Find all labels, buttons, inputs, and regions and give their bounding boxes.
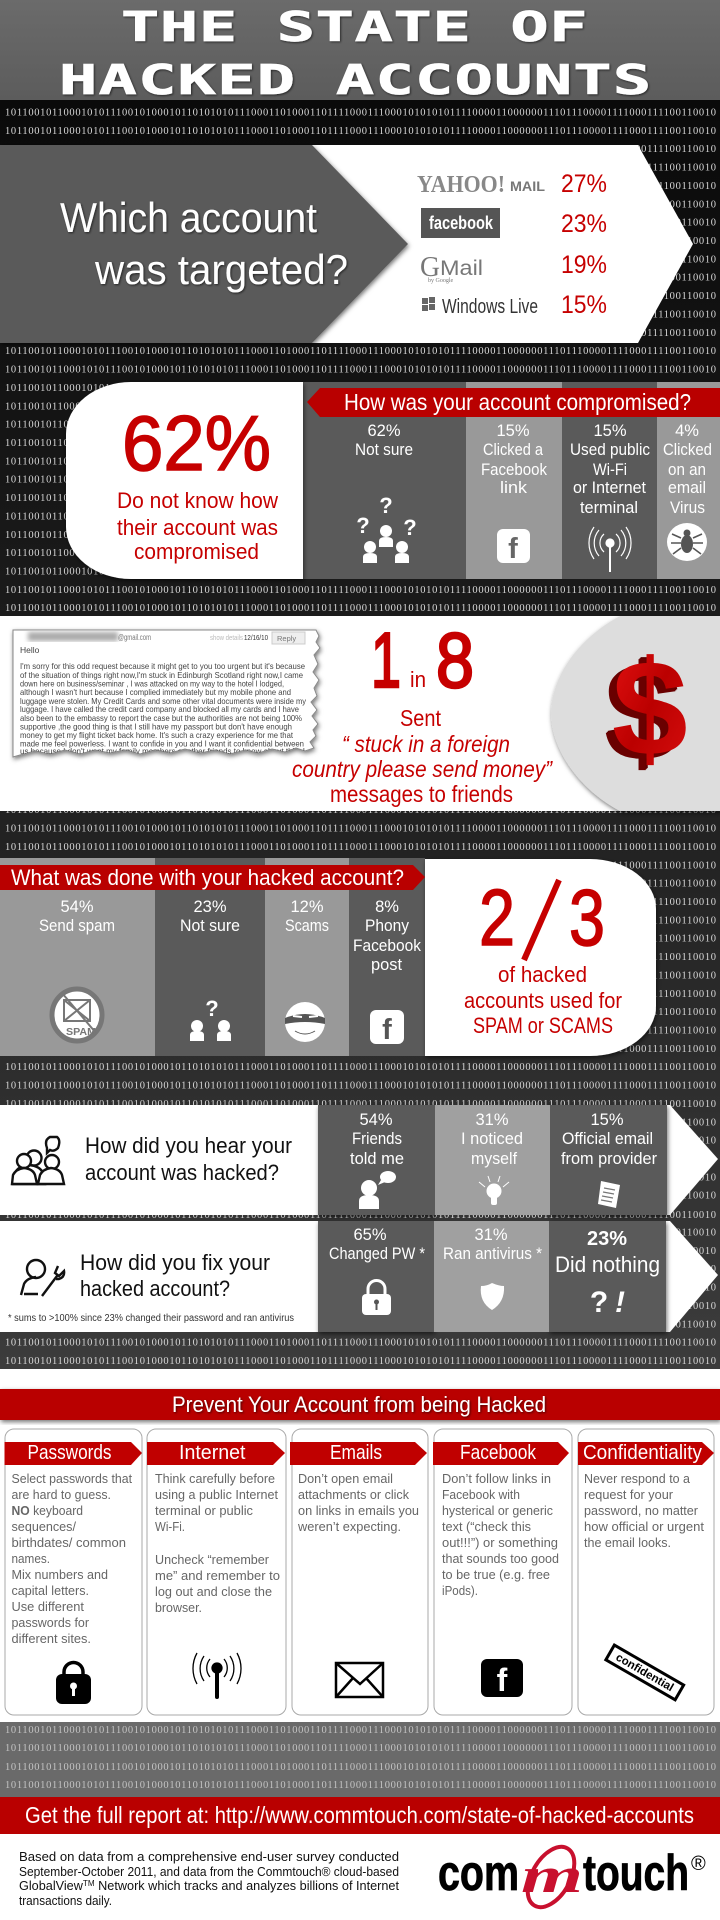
panel: how was your account compromised bbox=[66, 382, 720, 579]
binary code background rows: 10110010110001010111001010001011010101011100011010001101111000111000101010101111000011000000111011100001111000111100110010 bbox=[5, 181, 716, 192]
card: emails bbox=[290, 1429, 428, 1715]
column labels: Not sure bbox=[180, 917, 240, 935]
page background bbox=[0, 100, 720, 1369]
email screenshot: made me feel powerless. I want to confide in you and I want it confidential between bbox=[20, 738, 304, 748]
icon: person with wrench bbox=[21, 1260, 64, 1296]
card: passwords: Mix numbers and bbox=[12, 1567, 108, 1582]
stat: 1 in 8: in bbox=[410, 667, 426, 692]
binary code background rows: 10110010110001010111001010001011010101011100011010001101111000111000101010101111000011000000111011100001111000111100110010 bbox=[5, 530, 716, 541]
email screenshot: Reply bbox=[277, 634, 296, 643]
binary code background rows: 10110010110001010111001010001011010101011100011010001101111000111000101010101111000011000000111011100001111000111100110010 bbox=[5, 860, 716, 871]
question: how did you hear: How did you hear your bbox=[85, 1133, 292, 1158]
icon: document bbox=[598, 1181, 620, 1208]
binary code background rows bbox=[5, 108, 716, 1367]
footer binary band: 10110010110001010111001010001011010101011100011010001101111000111000101010101111000011000000111011100001111000111100110010 bbox=[5, 1780, 716, 1791]
panel: what was done with your hacked account bbox=[0, 858, 656, 1056]
stat: 62 percent: their account was bbox=[117, 515, 278, 540]
binary code background rows: 10110010110001010111001010001011010101011100011010001101111000111000101010101111000011000000111011100001111000111100110010 bbox=[5, 475, 716, 486]
footer binary band: 10110010110001010111001010001011010101011100011010001101111000111000101010101111000011000000111011100001111000111100110010 bbox=[5, 1725, 716, 1736]
card: facebook: Facebook bbox=[460, 1442, 537, 1464]
binary code background rows: 10110010110001010111001010001011010101011100011010001101111000111000101010101111000011000000111011100001111000111100110010 bbox=[5, 824, 716, 834]
binary code background rows: 10110010110001010111001010001011010101011100011010001101111000111000101010101111000011000000111011100001111000111100110010 bbox=[5, 456, 716, 467]
grey dollar circle bbox=[551, 616, 720, 811]
binary code background rows: 10110010110001010111001010001011010101011100011010001101111000111000101010101111000011000000111011100001111000111100110010 bbox=[5, 236, 716, 247]
email screenshot: down here on business/seminar , I was attacked on my way to the hotel I lodged, bbox=[20, 678, 284, 688]
card: facebook: to be true (e.g. free bbox=[442, 1567, 550, 1582]
card: passwords: Use different bbox=[12, 1599, 84, 1614]
column labels: post bbox=[371, 956, 402, 974]
question: how did you fix bbox=[80, 1250, 270, 1301]
icon: padlock bbox=[362, 1280, 391, 1315]
binary code background rows: 10110010110001010111001010001011010101011100011010001101111000111000101010101111000011000000111011100001111000111100110010 bbox=[5, 1154, 716, 1165]
column labels: 8% bbox=[375, 898, 399, 916]
card: internet: Internet bbox=[179, 1442, 246, 1464]
binary code background rows: 10110010110001010111001010001011010101011100011010001101111000111000101010101111000011000000111011100001111000111100110010 bbox=[5, 1210, 716, 1221]
icon: light bulb bbox=[479, 1176, 509, 1205]
column labels: 31% bbox=[475, 1111, 509, 1129]
email screenshot: us because I don't want my family members or other friends to know about this. I bbox=[20, 746, 305, 756]
footer methodology text: Based on data from a comprehensive end-user survey conducted bbox=[19, 1850, 399, 1864]
card: emails: weren’t expecting. bbox=[297, 1519, 401, 1534]
email screenshot: of the situation of things right now,I'm stuck in Edinburgh Scotland right now,I came bbox=[20, 670, 303, 680]
footer binary band: 10110010110001010111001010001011010101011100011010001101111000111000101010101111000011000000111011100001111000111100110010 bbox=[5, 1762, 716, 1773]
card: passwords: Select passwords that bbox=[12, 1471, 132, 1486]
binary code background rows: 10110010110001010111001010001011010101011100011010001101111000111000101010101111000011000000111011100001111000111100110010 bbox=[5, 218, 716, 229]
icon: confused people: ? bbox=[356, 513, 370, 538]
email screenshot: show details bbox=[210, 635, 243, 642]
binary code background rows: 10110010110001010111001010001011010101011100011010001101111000111000101010101111000011000000111011100001111000111100110010 bbox=[5, 511, 716, 522]
card: facebook bbox=[433, 1429, 572, 1715]
binary code background rows: 10110010110001010111001010001011010101011100011010001101111000111000101010101111000011000000111011100001111000111100110010 bbox=[5, 842, 716, 853]
icon: no spam bbox=[52, 989, 102, 1041]
binary code background rows: 10110010110001010111001010001011010101011100011010001101111000111000101010101111000011000000111011100001111000111100110010 bbox=[5, 915, 716, 926]
card: emails: Don’t open email bbox=[298, 1471, 393, 1486]
banner: what was done: What was done with your hacked account? bbox=[11, 865, 404, 890]
column labels: Clicked a bbox=[483, 441, 544, 459]
binary code background rows: 10110010110001010111001010001011010101011100011010001101111000111000101010101111000011000000111011100001111000111100110010 bbox=[5, 566, 716, 578]
binary code background rows: 10110010110001010111001010001011010101011100011010001101111000111000101010101111000011000000111011100001111000111100110010 bbox=[5, 585, 716, 596]
column labels: told me bbox=[350, 1150, 404, 1168]
logo: gmail: Mail bbox=[440, 257, 483, 280]
icon: virus bug bbox=[667, 523, 707, 561]
banner: get the full report bbox=[0, 1797, 720, 1834]
column labels: 15% bbox=[496, 422, 530, 440]
footer methodology text bbox=[19, 1850, 400, 1908]
email screenshot: I'm sorry for this odd request because it might get to you too urgent but it's because bbox=[20, 661, 305, 671]
binary code background rows: 10110010110001010111001010001011010101011100011010001101111000111000101010101111000011000000111011100001111000111100110010 bbox=[5, 346, 716, 357]
panel: how did you hear bbox=[0, 1105, 718, 1215]
binary code background rows: 10110010110001010111001010001011010101011100011010001101111000111000101010101111000011000000111011100001111000111100110010 bbox=[5, 1099, 716, 1110]
card: emails: Emails bbox=[330, 1442, 382, 1464]
footer binary band: 10110010110001010111001010001011010101011100011010001101111000111000101010101111000011000000111011100001111000111100110010 bbox=[5, 1743, 716, 1754]
icon: black wifi antenna bbox=[193, 1653, 241, 1697]
question: how did you fix: hacked account? bbox=[80, 1276, 230, 1301]
binary code background rows: 10110010110001010111001010001011010101011100011010001101111000111000101010101111000011000000111011100001111000111100110010 bbox=[5, 1319, 716, 1330]
binary code background rows: 10110010110001010111001010001011010101011100011010001101111000111000101010101111000011000000111011100001111000111100110010 bbox=[5, 108, 716, 118]
column labels: Used public bbox=[570, 441, 650, 459]
icon: two people and question mark: ? bbox=[205, 996, 219, 1021]
heading: which account was targeted bbox=[60, 194, 348, 293]
card: facebook: text (“check this bbox=[442, 1519, 531, 1534]
logo: commtouch: touch bbox=[583, 1845, 689, 1901]
panel: which account was targeted bbox=[0, 145, 693, 343]
column labels: or Internet bbox=[573, 479, 646, 497]
column labels: 54% bbox=[359, 1111, 393, 1129]
card: passwords: passwords for bbox=[12, 1615, 90, 1630]
title: THE STATE OF bbox=[121, 3, 588, 51]
binary code background rows: 10110010110001010111001010001011010101011100011010001101111000111000101010101111000011000000111011100001111000111100110010 bbox=[5, 163, 716, 174]
binary code background rows: 10110010110001010111001010001011010101011100011010001101111000111000101010101111000011000000111011100001111000111100110010 bbox=[5, 144, 716, 155]
logo: gmail bbox=[420, 252, 483, 284]
binary code background rows: 10110010110001010111001010001011010101011100011010001101111000111000101010101111000011000000111011100001111000111100110010 bbox=[5, 199, 716, 210]
binary code background rows: 10110010110001010111001010001011010101011100011010001101111000111000101010101111000011000000111011100001111000111100110010 bbox=[5, 1007, 716, 1018]
card: facebook: out!!!”) or something bbox=[442, 1535, 558, 1550]
banner: prevent your account: Prevent Your Account from being Hacked bbox=[172, 1392, 546, 1417]
binary code background rows: 10110010110001010111001010001011010101011100011010001101111000111000101010101111000011000000111011100001111000111100110010 bbox=[5, 1026, 716, 1036]
column labels: 23% bbox=[193, 898, 227, 916]
icon: wifi antenna bbox=[589, 527, 631, 572]
column labels bbox=[39, 898, 422, 974]
card: facebook: Facebook with bbox=[442, 1487, 520, 1502]
stat: 1 in 8 bbox=[371, 616, 474, 704]
logo: commtouch: m bbox=[521, 1847, 583, 1903]
logo: yahoo mail: MAIL bbox=[510, 178, 545, 194]
binary code background rows: 10110010110001010111001010001011010101011100011010001101111000111000101010101111000011000000111011100001111000111100110010 bbox=[5, 970, 716, 981]
question: how did you hear: account was hacked? bbox=[85, 1160, 279, 1185]
card: internet: browser. bbox=[155, 1600, 202, 1615]
email screenshot: supportive ,the good thing is that I still have my passport but don't have enough bbox=[20, 722, 292, 732]
heading: which account was targeted: was targeted? bbox=[94, 246, 348, 293]
card: confidentiality: password, no matter bbox=[584, 1503, 699, 1518]
card: passwords: names. bbox=[12, 1551, 50, 1566]
binary code background rows: 10110010110001010111001010001011010101011100011010001101111000111000101010101111000011000000111011100001111000111100110010 bbox=[5, 126, 716, 137]
icon: black facebook bbox=[481, 1659, 523, 1698]
icon: facebook bbox=[497, 529, 530, 565]
column labels: Facebook bbox=[353, 937, 422, 955]
email screenshot: although I wasn't hurt because I complied immediately but my mobile phone and bbox=[20, 687, 291, 697]
column labels: Scams bbox=[285, 917, 329, 935]
column labels: 23% bbox=[587, 1228, 627, 1250]
column labels: Phony bbox=[365, 917, 410, 935]
column labels: I noticed bbox=[461, 1130, 523, 1148]
column labels: from provider bbox=[561, 1150, 657, 1168]
column labels: Virus bbox=[670, 499, 705, 517]
logo: gmail: by Google bbox=[428, 278, 454, 284]
binary code background rows: 10110010110001010111001010001011010101011100011010001101111000111000101010101111000011000000111011100001111000111100110010 bbox=[5, 805, 716, 816]
email screenshot: 12/16/10 bbox=[244, 633, 268, 642]
card: facebook: Don’t follow links in bbox=[442, 1471, 551, 1486]
stat: 62 percent: 62% bbox=[122, 399, 271, 487]
stat: 62 percent: compromised bbox=[134, 539, 259, 564]
card: internet: using a public Internet bbox=[155, 1487, 278, 1502]
column labels: Friends bbox=[352, 1130, 402, 1148]
icon: 3d dollar sign: $ bbox=[604, 637, 680, 789]
binary code background rows: 10110010110001010111001010001011010101011100011010001101111000111000101010101111000011000000111011100001111000111100110010 bbox=[5, 273, 716, 284]
footer methodology text: September-October 2011, and data from the Commtouch® cloud-based bbox=[19, 1865, 399, 1879]
title bbox=[59, 3, 651, 104]
stat: 62 percent: Do not know how bbox=[117, 488, 278, 513]
panel: 1 in 8 bbox=[0, 616, 720, 811]
card: confidentiality: Confidentiality bbox=[583, 1442, 702, 1464]
percentages by provider: 15% bbox=[561, 291, 607, 319]
email screenshot: luggage. I have called the credit card company and blocked all my cards and I have bbox=[20, 704, 299, 714]
card: facebook: hysterical or generic bbox=[442, 1503, 553, 1518]
binary code background rows: 10110010110001010111001010001011010101011100011010001101111000111000101010101111000011000000111011100001111000111100110010 bbox=[5, 1062, 716, 1073]
card: passwords: are hard to guess. bbox=[12, 1487, 111, 1502]
card: passwords bbox=[4, 1429, 142, 1715]
icon: 3d dollar sign: $ bbox=[606, 635, 682, 787]
binary code background rows: 10110010110001010111001010001011010101011100011010001101111000111000101010101111000011000000111011100001111000111100110010 bbox=[5, 254, 716, 265]
column labels: 31% bbox=[474, 1226, 508, 1244]
binary code background rows: 10110010110001010111001010001011010101011100011010001101111000111000101010101111000011000000111011100001111000111100110010 bbox=[5, 438, 716, 449]
binary code background rows: 10110010110001010111001010001011010101011100011010001101111000111000101010101111000011000000111011100001111000111100110010 bbox=[5, 1191, 716, 1202]
banner: prevent your account bbox=[0, 1389, 720, 1420]
stat: two thirds: SPAM or SCAMS bbox=[473, 1013, 613, 1038]
binary code background rows: 10110010110001010111001010001011010101011100011010001101111000111000101010101111000011000000111011100001111000111100110010 bbox=[5, 879, 716, 890]
panel: how did you fix bbox=[0, 1221, 718, 1332]
binary code background rows: 10110010110001010111001010001011010101011100011010001101111000111000101010101111000011000000111011100001111000111100110010 bbox=[5, 1081, 716, 1092]
footer methodology text: transactions daily. bbox=[19, 1894, 112, 1908]
icon: confidential stamp bbox=[606, 1645, 684, 1700]
footer methodology text: Network which tracks and analyzes billions of Internet bbox=[95, 1879, 400, 1893]
card: internet: Uncheck “remember bbox=[155, 1552, 270, 1567]
column labels: link bbox=[500, 479, 528, 497]
card: internet: log out and close the bbox=[155, 1584, 272, 1599]
icon: facebook: f bbox=[382, 1014, 392, 1046]
icon: 3d dollar sign: $ bbox=[612, 632, 688, 784]
card: facebook: that sounds too good bbox=[442, 1551, 559, 1566]
stat: 1 in 8: 1 bbox=[371, 616, 401, 704]
binary code background rows: 10110010110001010111001010001011010101011100011010001101111000111000101010101111000011000000111011100001111000111100110010 bbox=[5, 364, 716, 376]
logo: commtouch: com bbox=[438, 1845, 519, 1901]
column labels: Not sure bbox=[355, 441, 413, 459]
message text bbox=[292, 705, 553, 807]
icon: facebook bbox=[370, 1010, 404, 1046]
stat: two thirds: of hacked bbox=[498, 962, 587, 987]
footer methodology text: GlobalView bbox=[19, 1879, 82, 1893]
card: internet: me” and remember to bbox=[155, 1568, 280, 1583]
email screenshot: luggage were stolen. My Credit Cards and some other vital documents were inside my bbox=[20, 696, 307, 706]
binary code background rows: 10110010110001010111001010001011010101011100011010001101111000111000101010101111000011000000111011100001111000111100110010 bbox=[5, 934, 716, 945]
logo: facebook bbox=[421, 208, 500, 238]
column labels: Facebook bbox=[481, 461, 548, 479]
footer binary band bbox=[0, 1722, 720, 1797]
card: internet: Think carefully before bbox=[155, 1471, 275, 1486]
binary code background rows: 10110010110001010111001010001011010101011100011010001101111000111000101010101111000011000000111011100001111000111100110010 bbox=[5, 1228, 716, 1238]
logo: windows live bbox=[422, 296, 538, 318]
email screenshot: @gmail.com bbox=[118, 633, 151, 642]
column labels: Send spam bbox=[39, 917, 115, 935]
message text: “ stuck in a foreign bbox=[342, 731, 510, 757]
logo: yahoo mail: YAHOO! bbox=[417, 172, 505, 198]
footnote: * sums to >100% since 23% changed their password and ran antivirus bbox=[8, 1313, 294, 1324]
binary code background rows: 10110010110001010111001010001011010101011100011010001101111000111000101010101111000011000000111011100001111000111100110010 bbox=[5, 291, 716, 302]
percentages by provider: 23% bbox=[561, 210, 607, 238]
binary code background rows: 10110010110001010111001010001011010101011100011010001101111000111000101010101111000011000000111011100001111000111100110010 bbox=[5, 310, 716, 320]
binary code background rows: 10110010110001010111001010001011010101011100011010001101111000111000101010101111000011000000111011100001111000111100110010 bbox=[5, 548, 716, 559]
binary code background rows: 10110010110001010111001010001011010101011100011010001101111000111000101010101111000011000000111011100001111000111100110010 bbox=[5, 952, 716, 963]
icon: no spam: SPAM bbox=[66, 1027, 96, 1038]
icon: question and exclamation: ! bbox=[615, 1286, 625, 1319]
icon: envelope bbox=[336, 1663, 383, 1697]
card: emails: on links in emails you bbox=[298, 1503, 419, 1518]
logo: commtouch bbox=[438, 1839, 706, 1915]
icon: confused people: ? bbox=[379, 493, 393, 518]
card: internet: terminal or public bbox=[155, 1503, 253, 1518]
column labels: 15% bbox=[590, 1111, 624, 1129]
logo: commtouch: ® bbox=[691, 1853, 706, 1875]
binary code background rows: 10110010110001010111001010001011010101011100011010001101111000111000101010101111000011000000111011100001111000111100110010 bbox=[5, 897, 716, 908]
card: passwords: birthdates/ common bbox=[12, 1535, 126, 1550]
card: internet: Wi-Fi. bbox=[155, 1519, 185, 1534]
card: confidentiality: request for your bbox=[584, 1487, 674, 1502]
stat: two thirds bbox=[464, 873, 622, 1038]
binary code background rows: 10110010110001010111001010001011010101011100011010001101111000111000101010101111000011000000111011100001111000111100110010 bbox=[5, 328, 716, 339]
percentages by provider bbox=[561, 170, 607, 319]
binary code background rows: 10110010110001010111001010001011010101011100011010001101111000111000101010101111000011000000111011100001111000111100110010 bbox=[5, 420, 716, 431]
card: passwords: different sites. bbox=[12, 1631, 91, 1646]
column labels: Did nothing bbox=[555, 1252, 660, 1277]
stat: two thirds: accounts used for bbox=[464, 988, 622, 1013]
card: passwords: Passwords bbox=[28, 1442, 112, 1464]
icon: two people and question mark bbox=[190, 996, 231, 1041]
icon: people talking bbox=[12, 1137, 64, 1184]
binary code background rows: 10110010110001010111001010001011010101011100011010001101111000111000101010101111000011000000111011100001111000111100110010 bbox=[5, 401, 716, 412]
card: internet bbox=[147, 1429, 286, 1715]
question: how did you hear bbox=[85, 1133, 292, 1185]
icon: question and exclamation bbox=[590, 1286, 625, 1319]
column labels: 54% bbox=[60, 898, 94, 916]
binary code background rows: 10110010110001010111001010001011010101011100011010001101111000111000101010101111000011000000111011100001111000111100110010 bbox=[5, 493, 716, 504]
title: HACKED ACCOUNTS bbox=[59, 56, 651, 104]
icon: masked face bbox=[285, 1002, 325, 1042]
stat: 1 in 8: 8 bbox=[436, 616, 474, 704]
column labels: 4% bbox=[675, 422, 699, 440]
message text: messages to friends bbox=[330, 781, 513, 807]
message text: Sent bbox=[400, 705, 442, 731]
column labels: Wi-Fi bbox=[593, 461, 627, 479]
column labels: 65% bbox=[353, 1226, 387, 1244]
message text: country please send money” bbox=[292, 756, 553, 782]
footer methodology text: TM bbox=[83, 1879, 95, 1888]
column labels: Clicked bbox=[663, 441, 712, 459]
icon: black facebook: f bbox=[497, 1662, 508, 1698]
card: confidentiality: how official or urgent bbox=[584, 1519, 704, 1534]
stat: two thirds: 2 bbox=[479, 873, 515, 962]
column labels: Ran antivirus * bbox=[443, 1245, 543, 1263]
column labels bbox=[355, 422, 712, 517]
email screenshot: also been to the embassy to report the case but the authorities are not being 100% bbox=[20, 713, 302, 723]
column labels bbox=[329, 1226, 660, 1277]
card: passwords: NO keyboard bbox=[12, 1503, 83, 1518]
column labels: terminal bbox=[580, 499, 638, 517]
icon: confused people: ? bbox=[403, 515, 417, 540]
binary code background rows: 10110010110001010111001010001011010101011100011010001101111000111000101010101111000011000000111011100001111000111100110010 bbox=[5, 603, 716, 614]
stat: two thirds: 3 bbox=[569, 873, 605, 962]
column labels: Changed PW * bbox=[329, 1245, 425, 1263]
binary code background rows: 10110010110001010111001010001011010101011100011010001101111000111000101010101111000011000000111011100001111000111100110010 bbox=[5, 1264, 716, 1275]
icon: black padlock bbox=[56, 1662, 91, 1704]
email screenshot: Hello bbox=[20, 645, 40, 655]
percentages by provider: 27% bbox=[561, 170, 607, 198]
card: confidentiality: Never respond to a bbox=[584, 1471, 691, 1486]
card: passwords: capital letters. bbox=[12, 1583, 89, 1598]
column labels: on an bbox=[668, 461, 706, 479]
column labels bbox=[350, 1111, 657, 1168]
logo: gmail: G bbox=[420, 252, 440, 283]
binary code background rows: 10110010110001010111001010001011010101011100011010001101111000111000101010101111000011000000111011100001111000111100110010 bbox=[5, 383, 716, 394]
icon: facebook: f bbox=[508, 533, 518, 565]
binary code background rows: 10110010110001010111001010001011010101011100011010001101111000111000101010101111000011000000111011100001111000111100110010 bbox=[5, 1338, 716, 1349]
binary code background rows: 10110010110001010111001010001011010101011100011010001101111000111000101010101111000011000000111011100001111000111100110010 bbox=[5, 1044, 716, 1055]
column labels: email bbox=[668, 479, 706, 497]
binary code background rows: 10110010110001010111001010001011010101011100011010001101111000111000101010101111000011000000111011100001111000111100110010 bbox=[5, 1301, 716, 1312]
card: passwords: sequences/ bbox=[12, 1519, 76, 1534]
icon: question and exclamation: ? bbox=[590, 1286, 608, 1319]
binary code background rows: 10110010110001010111001010001011010101011100011010001101111000111000101010101111000011000000111011100001111000111100110010 bbox=[5, 1246, 716, 1257]
card: emails: attachments or click bbox=[298, 1487, 409, 1502]
column labels: 15% bbox=[593, 422, 627, 440]
email screenshot: money to get my flight ticket back home. It's such a crazy experience for me that bbox=[20, 730, 294, 740]
icon: confused people bbox=[356, 493, 417, 563]
column labels: Official email bbox=[562, 1130, 653, 1148]
icon: person with speech bubble bbox=[359, 1171, 396, 1209]
binary code background rows: 10110010110001010111001010001011010101011100011010001101111000111000101010101111000011000000111011100001111000111100110010 bbox=[5, 1117, 716, 1128]
header band with title bbox=[0, 0, 720, 104]
column labels: 62% bbox=[367, 422, 401, 440]
email screenshot bbox=[13, 630, 320, 757]
logo: windows live: Windows Live bbox=[442, 296, 538, 318]
binary code background rows: 10110010110001010111001010001011010101011100011010001101111000111000101010101111000011000000111011100001111000111100110010 bbox=[5, 1136, 716, 1147]
heading: which account was targeted: Which account bbox=[60, 194, 317, 241]
icon: confidential stamp: confidential bbox=[614, 1652, 675, 1694]
percentages by provider: 19% bbox=[561, 251, 607, 279]
icon: 3d dollar sign: $ bbox=[605, 636, 681, 788]
question: how did you fix: How did you fix your bbox=[80, 1250, 270, 1275]
white prevention section bbox=[0, 1369, 720, 1722]
binary code background rows: 10110010110001010111001010001011010101011100011010001101111000111000101010101111000011000000111011100001111000111100110010 bbox=[5, 1172, 716, 1183]
column labels: 12% bbox=[290, 898, 324, 916]
logo: facebook: facebook bbox=[429, 213, 494, 233]
column labels: myself bbox=[471, 1150, 517, 1168]
binary code background rows: 10110010110001010111001010001011010101011100011010001101111000111000101010101111000011000000111011100001111000111100110010 bbox=[5, 1356, 716, 1367]
card: facebook: iPods). bbox=[442, 1583, 478, 1598]
card: confidentiality bbox=[578, 1429, 714, 1715]
card: confidentiality: the email looks. bbox=[584, 1535, 671, 1550]
binary code background rows: 10110010110001010111001010001011010101011100011010001101111000111000101010101111000011000000111011100001111000111100110010 bbox=[5, 1282, 716, 1294]
icon: shield bbox=[481, 1283, 504, 1310]
binary code background rows: 10110010110001010111001010001011010101011100011010001101111000111000101010101111000011000000111011100001111000111100110010 bbox=[5, 989, 716, 1000]
stat: 62 percent bbox=[117, 399, 278, 564]
